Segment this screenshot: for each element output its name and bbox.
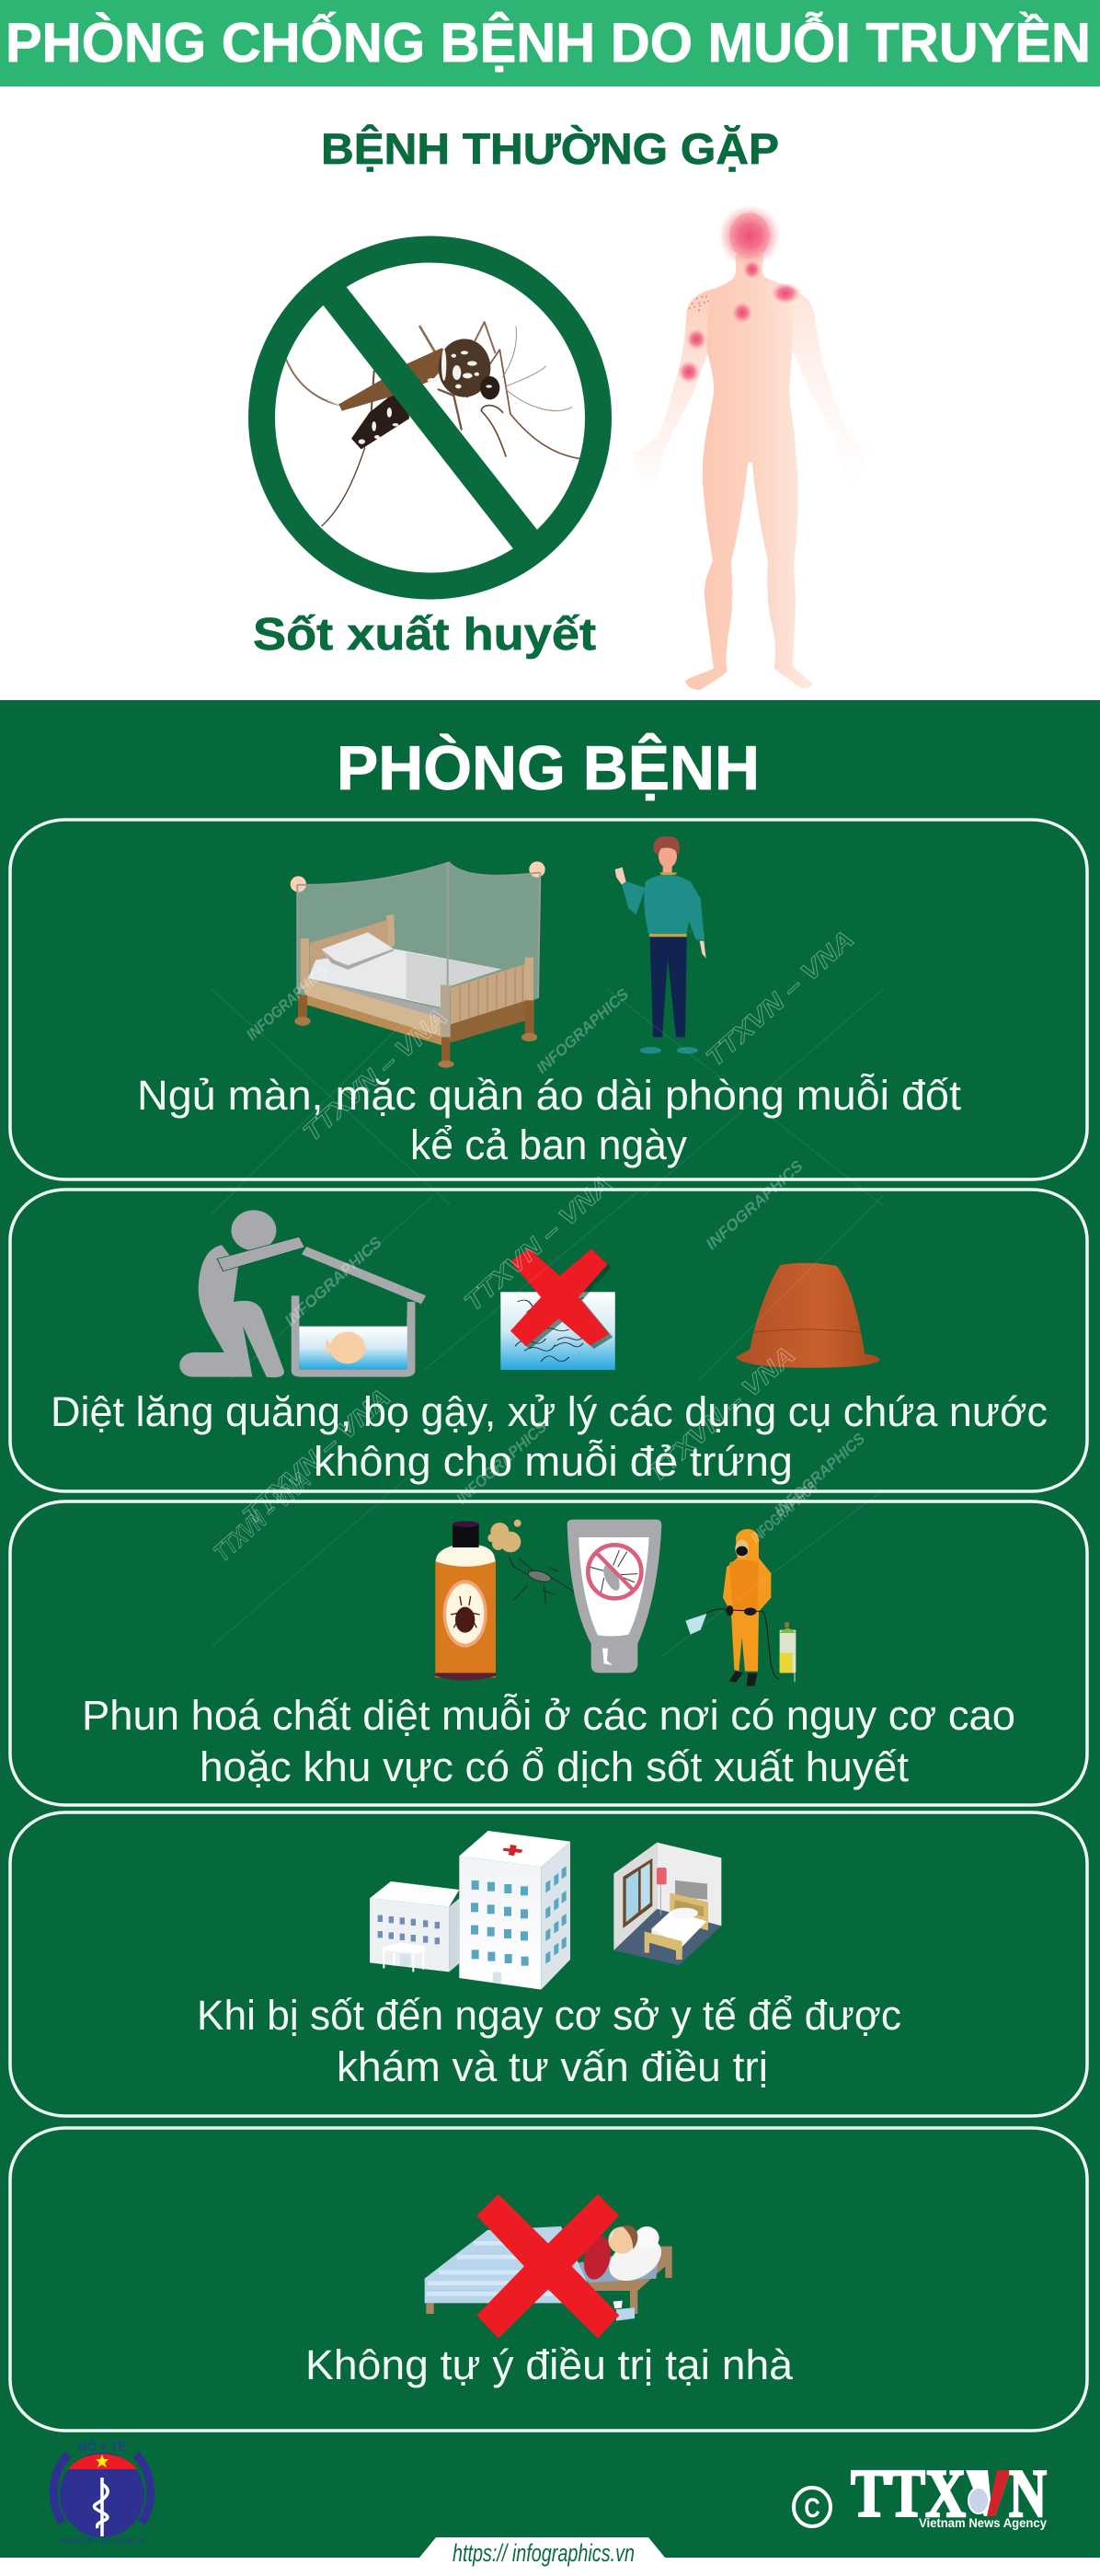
watermarks: TTXVN – VNA (642, 1341, 800, 1488)
logo: ministry of health: BỘ Y TẾ (78, 2440, 126, 2454)
mosquito (287, 322, 579, 526)
icon: bed with mosquito net (291, 861, 545, 1068)
logo: TTXVN (794, 2456, 1047, 2532)
text: panel 1: kể cả ban ngày (410, 1121, 687, 1168)
text: panel 3 (82, 1692, 1015, 1790)
text: panel 2 (51, 1388, 1048, 1485)
header banner (0, 0, 1100, 86)
label: dengue: Sốt xuất huyết (253, 610, 596, 660)
watermarks: INFOGRAPHICS (243, 961, 332, 1043)
panel 2: kill larvae (10, 1190, 1087, 1491)
panel 5: no self treatment (10, 2128, 1087, 2431)
text: panel 4 (197, 1992, 901, 2090)
watermarks (209, 926, 883, 1656)
icon: repellent tube (567, 1520, 661, 1673)
watermarks: INFOGRAPHICS (748, 1478, 820, 1547)
icon: hospital buildings (370, 1831, 570, 1990)
watermarks: TTXVN – VNA (701, 926, 859, 1072)
text: panel 1: Ngủ màn, mặc quần áo dài phòng muỗi đốt (137, 1072, 962, 1119)
logo: TTXVN: TTX (851, 2456, 966, 2532)
logo: ministry of health: MINISTRY OF HEALTH (61, 2536, 145, 2547)
watermarks: TTXVN – VNA (459, 1170, 617, 1317)
text: panel 4: khám và tư vấn điều trị (337, 2043, 768, 2090)
logo: TTXVN: N (1009, 2456, 1047, 2532)
logo: TTXVN: Vietnam News Agency (919, 2515, 1047, 2530)
text: panel 1 (137, 1072, 962, 1168)
prohibition bar (315, 277, 544, 559)
watermarks: INFOGRAPHICS (703, 1156, 807, 1253)
text: panel 3: Phun hoá chất diệt muỗi ở các nơi có nguy cơ cao (82, 1692, 1015, 1739)
icon: hospital room (613, 1843, 721, 1965)
logo: TTXVN: C (804, 2491, 820, 2524)
watermarks: INFOGRAPHICS (281, 1233, 385, 1329)
text: website: https:// infographics.vn (453, 2539, 635, 2567)
icon: insecticide spray can (435, 1520, 577, 1681)
prohibition ring (261, 249, 598, 586)
text: panel 3: hoặc khu vực có ổ dịch sốt xuất huyết (200, 1743, 909, 1790)
logo: ministry of health (53, 2440, 151, 2547)
icon: worker in protective suit (685, 1529, 796, 1686)
text: panel 4: Khi bị sốt đến ngay cơ sở y tế để được (197, 1992, 901, 2039)
watermarks: INFOGRAPHICS (453, 1418, 551, 1508)
panel 3: spray chemicals (10, 1501, 1087, 1805)
icon: man in long clothes (615, 836, 706, 1053)
text: panel 2: không cho muỗi đẻ trứng (314, 1438, 793, 1485)
panel: prevention background (0, 700, 1100, 2558)
heading: common disease: BỆNH THƯỜNG GẶP (321, 124, 779, 173)
watermarks: TTXVN – VNA (298, 1003, 453, 1146)
icon: larvae in water crossed out (500, 1248, 615, 1370)
icon: clay pot (736, 1263, 880, 1368)
text: panel 5: Không tự ý điều trị tại nhà (305, 2341, 794, 2388)
small mosquito (509, 1557, 577, 1604)
watermarks: INFOGRAPHICS (533, 985, 633, 1077)
icon: mosquito prohibited (261, 249, 598, 586)
text: panel 2: Diệt lăng quăng, bọ gậy, xử lý các dụng cụ chứa nước (51, 1388, 1048, 1435)
icon: person tending water tank with fish (179, 1210, 426, 1377)
icon: sick person in bed crossed out (425, 2194, 672, 2339)
heading: prevention: PHÒNG BỆNH (337, 732, 760, 803)
illustration: human body with symptoms (633, 204, 869, 690)
footer white strip with URL tab (0, 2537, 1100, 2576)
watermarks: TTXVN – VNA (237, 1384, 395, 1530)
watermarks: INFOGRAPHICS (772, 1430, 869, 1520)
panel 1: bed net and long clothes (10, 820, 1087, 1179)
title: PHÒNG CHỐNG BỆNH DO MUỖI TRUYỀN (6, 12, 1091, 74)
panel 4: go to medical facility (10, 1812, 1087, 2116)
watermarks: TTXVN – VNA (209, 1466, 315, 1567)
